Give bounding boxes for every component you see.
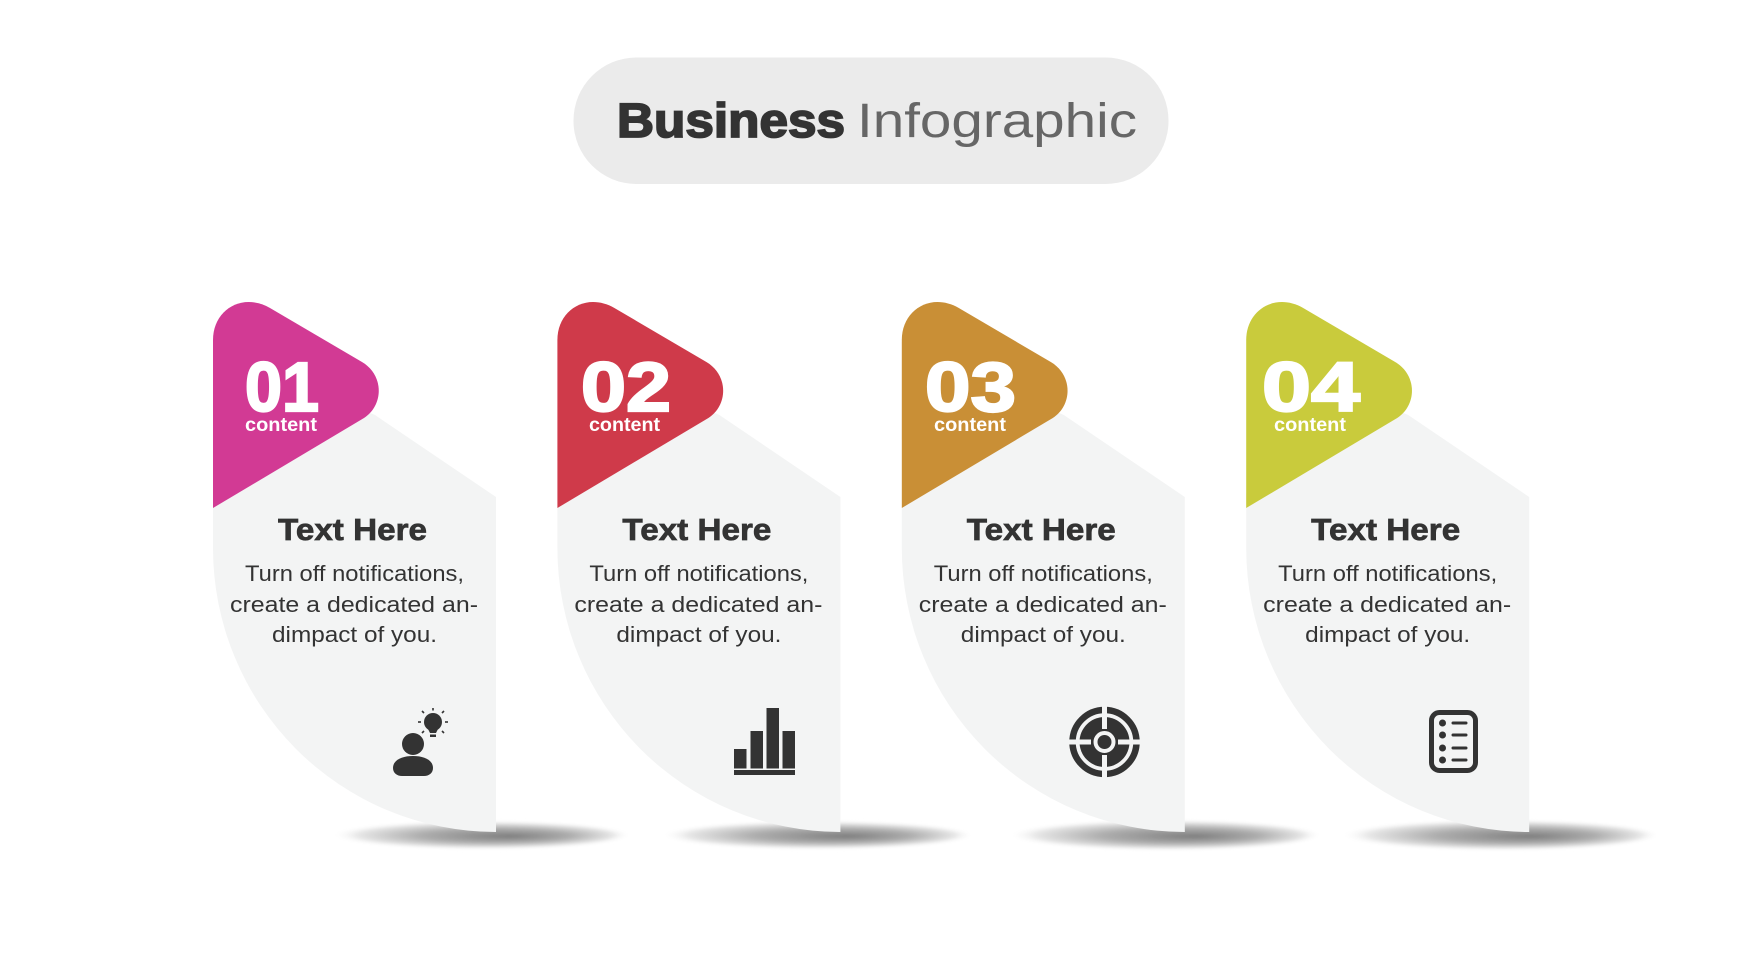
panel: step 01: content [245, 415, 318, 436]
icon: bar chart [734, 708, 795, 775]
title pill: Business [617, 95, 845, 148]
panel: step 04: Text Here [1311, 512, 1460, 547]
panel: step 01: dimpact of you. [272, 622, 437, 647]
panel: step 04: Turn off notifications, [1278, 561, 1497, 586]
panel: step 04: 04 [1262, 348, 1360, 426]
panel: step 03 [902, 302, 1322, 850]
icon: person with lightbulb [393, 708, 448, 776]
panel: step 03: dimpact of you. [961, 622, 1126, 647]
panel: step 03: create a dedicated an- [919, 592, 1167, 617]
panel: step 01: Text Here [278, 512, 427, 547]
icon: target [1068, 706, 1141, 778]
panel: step 01: 01 [245, 348, 319, 426]
panel: step 01 [213, 302, 631, 849]
title pill [574, 58, 1168, 184]
panel: step 03: Turn off notifications, [934, 561, 1153, 586]
panel: step 02: Turn off notifications, [589, 561, 808, 586]
panel: step 04: content [1274, 415, 1347, 436]
icon: checklist [1432, 712, 1476, 770]
title pill: Infographic [857, 95, 1137, 148]
panel: step 02: Text Here [622, 512, 771, 547]
panel: step 04: create a dedicated an- [1263, 592, 1511, 617]
panel: step 03: 03 [925, 348, 1016, 426]
panel: step 02: create a dedicated an- [574, 592, 822, 617]
panel: step 03: content [934, 415, 1007, 436]
panel: step 02: 02 [581, 348, 671, 426]
panel: step 04: dimpact of you. [1305, 622, 1470, 647]
panel: step 04 [1246, 302, 1660, 850]
panel: step 02: dimpact of you. [616, 622, 781, 647]
panel: step 02: content [589, 415, 661, 436]
panel: step 01: Turn off notifications, [245, 561, 464, 586]
panel: step 03: Text Here [967, 512, 1116, 547]
panel: step 02 [557, 302, 974, 849]
panel: step 01: create a dedicated an- [230, 592, 478, 617]
